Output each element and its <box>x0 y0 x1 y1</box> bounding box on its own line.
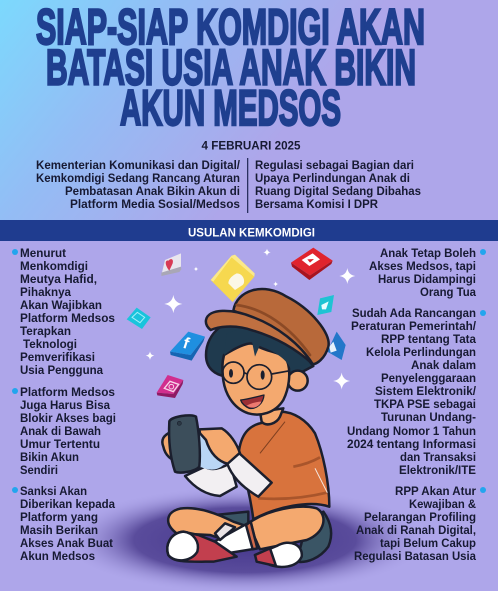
right column bullet 1: Akses Medsos, tapi <box>369 259 476 273</box>
right column bullet 2: Elektronik/ITE <box>399 463 476 477</box>
floor shadow <box>60 486 430 591</box>
left column bullet 2: Umur Tertentu <box>20 437 100 451</box>
face <box>222 343 289 415</box>
icon: yellow card <box>211 255 255 302</box>
left column bullet 1: Pemverifikasi <box>20 350 95 364</box>
intro text: left column: Kementerian Komunikasi dan Digital/ <box>36 159 241 172</box>
right column bullet 3: Kewajiban & <box>409 497 476 511</box>
legs <box>168 507 323 549</box>
right column bullet 2: TKPA PSE sebagai <box>374 397 476 411</box>
intro text: left column: Pembatasan Anak Bikin Akun di <box>65 185 240 198</box>
bullet dot <box>12 388 18 394</box>
left column bullet 1: Menkomdigi <box>20 259 88 273</box>
right column bullet 2: Undang Nomor 1 Tahun <box>347 424 476 438</box>
intro text: left column: Platform Media Sosial/Medsos <box>70 198 240 211</box>
left column bullet 2: Platform Medsos <box>20 385 115 399</box>
right column bullet 3: Pelarangan Profiling <box>364 510 476 524</box>
icon: instagram card <box>157 375 183 398</box>
intro text: right column <box>255 159 421 211</box>
icon: facebook card <box>170 332 205 361</box>
icon: like card <box>327 332 346 360</box>
right column bullet 1 <box>369 246 486 299</box>
right column bullet 2: Turunan Undang- <box>381 410 476 424</box>
right column bullet 2: Sudah Ada Rancangan <box>352 306 476 320</box>
right column bullet 2 <box>347 306 486 477</box>
mouth <box>241 395 264 408</box>
illustration: child with phone and social icons <box>127 248 355 567</box>
left column bullet 3: Sanksi Akan <box>20 484 87 498</box>
shorts <box>215 512 331 562</box>
left column bullet 2: Anak di Bawah <box>20 424 101 438</box>
right column bullet 1: Harus Didampingi <box>378 272 476 286</box>
shirt details <box>258 422 327 499</box>
phone glow <box>199 433 223 470</box>
phone <box>169 415 200 473</box>
left column bullet 2: Sendiri <box>20 463 58 477</box>
left column bullet 1: Pihaknya <box>20 285 71 299</box>
left column bullet 2 <box>12 385 116 477</box>
left column bullet 1: Meutya Hafid, <box>20 272 97 286</box>
left column bullet 2: Bikin Akun <box>20 450 79 464</box>
bullet dot <box>12 249 18 255</box>
intro text: right column: Upaya Perlindungan Anak di <box>255 172 410 185</box>
bullet dot <box>12 487 18 493</box>
bullet dot <box>480 487 486 493</box>
right column bullet 1: Anak Tetap Boleh <box>380 246 476 260</box>
title <box>36 0 425 136</box>
date: 4 FEBRUARI 2025 <box>202 140 301 152</box>
bullet dot <box>480 249 486 255</box>
right column bullet 2: Kelola Perlindungan <box>366 345 476 359</box>
pointing hand <box>199 428 240 464</box>
right column bullet 2: Anak dalam <box>411 358 476 372</box>
hair fringe <box>224 325 310 368</box>
left column bullet 1: Usia Pengguna <box>20 363 103 377</box>
section header band <box>0 220 498 241</box>
left column bullet 1: Menurut <box>20 246 66 260</box>
left column bullet 3: Masih Berikan <box>20 523 98 537</box>
left column bullet 3: Akun Medsos <box>20 549 95 563</box>
hair back <box>206 320 313 377</box>
left column bullet 1: Teknologi <box>23 337 77 351</box>
torso shirt <box>239 412 329 519</box>
icon: facebook card: f <box>181 335 192 353</box>
sparkles <box>146 249 355 390</box>
right sleeve <box>227 453 272 497</box>
neck <box>260 408 283 424</box>
intro text: right column: Ruang Digital Sedang Dibahas <box>255 185 421 198</box>
eyes <box>229 369 265 380</box>
section header band: USULAN KEMKOMDIGI <box>188 226 315 240</box>
intro text: right column: Bersama Komisi I DPR <box>255 198 379 211</box>
right column bullet 2: RPP tentang Tata <box>381 332 476 346</box>
left column bullet 1: Akan Wajibkan <box>20 298 102 312</box>
left column bullet 3: Akses Anak Buat <box>20 536 113 550</box>
socks <box>214 522 257 555</box>
right column bullet 2: Peraturan Pemerintah/ <box>351 319 477 333</box>
right column bullet 2: Sistem Elektronik/ <box>375 384 477 398</box>
right column bullet 1: Orang Tua <box>420 285 476 299</box>
shoes <box>167 532 302 567</box>
bullet dot <box>480 310 486 316</box>
left column bullet 1: Platform Medsos <box>20 311 115 325</box>
left column bullet 1: Terapkan <box>20 324 71 338</box>
right column bullet 3: tapi Belum Cakup <box>380 536 476 550</box>
right column bullet 2: Penyelenggaraan <box>381 371 476 385</box>
intro text: left column: Kemkomdigi Sedang Rancang Aturan <box>36 172 240 185</box>
left arm and sleeve <box>185 463 237 496</box>
hat <box>206 289 329 364</box>
icon: heart card <box>161 253 181 276</box>
left column bullet 3 <box>12 484 115 563</box>
ear <box>288 371 308 391</box>
right column bullet 2: 2024 tentang Informasi <box>347 437 476 451</box>
right column bullet 3: Regulasi Batasan Usia <box>354 549 476 563</box>
right column bullet 2: dan Transaksi <box>400 450 476 464</box>
right column bullet 3 <box>354 484 486 563</box>
left hand <box>162 432 178 460</box>
left column bullet 2: Blokir Akses bagi <box>20 411 116 425</box>
left column bullet 2: Juga Harus Bisa <box>20 398 110 412</box>
right column bullet 3: RPP Akan Atur <box>395 484 476 498</box>
icon: twitter card <box>317 295 334 315</box>
left column bullet 3: Platform yang <box>20 510 98 524</box>
intro text: right column: Regulasi sebagai Bagian dari <box>255 159 414 172</box>
title: AKUN MEDSOS <box>120 80 341 136</box>
intro text: left column <box>36 159 241 211</box>
left column bullet 3: Diberikan kepada <box>20 497 115 511</box>
glasses <box>223 362 290 389</box>
left column bullet 1 <box>12 246 115 377</box>
right column bullet 3: Anak di Ranah Digital, <box>356 523 476 537</box>
icon: cyan card <box>127 308 151 329</box>
icon: youtube card <box>291 248 333 280</box>
